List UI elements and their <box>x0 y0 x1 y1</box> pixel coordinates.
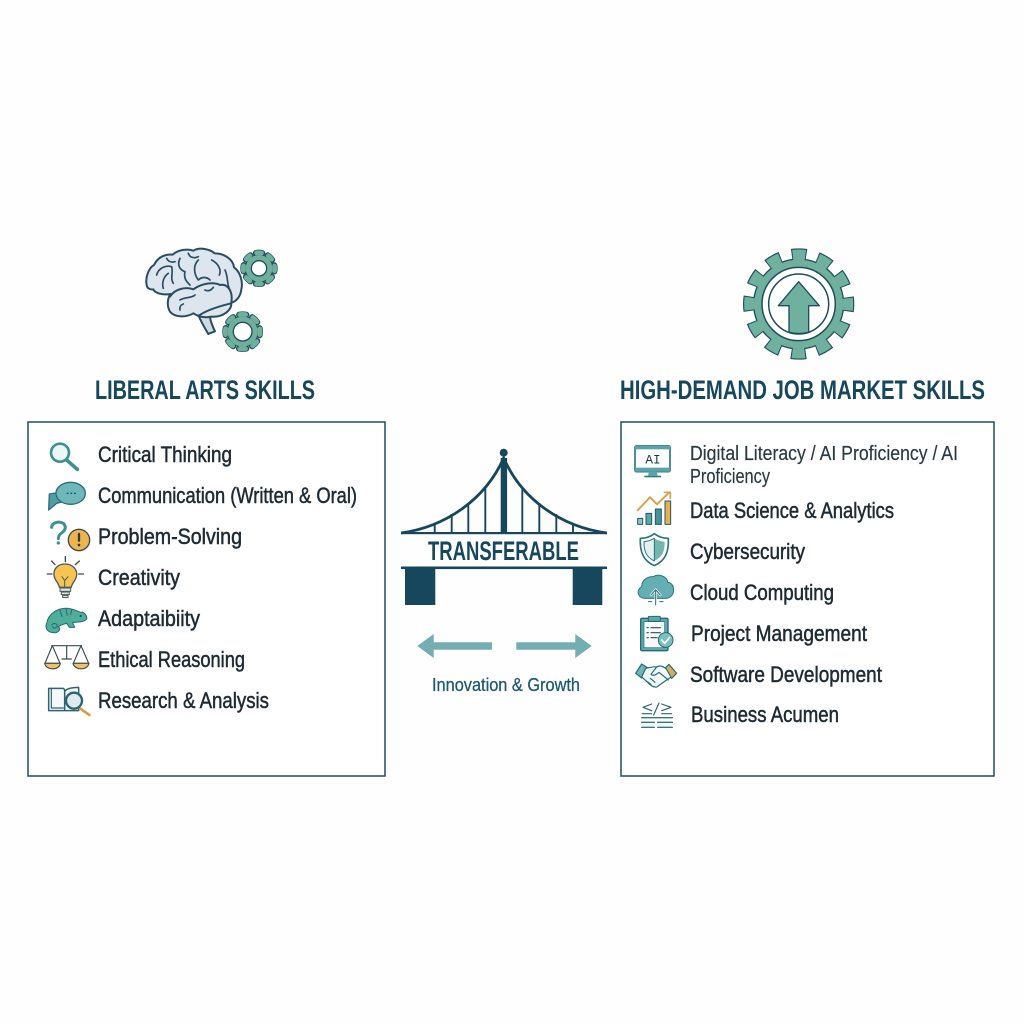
icon: speech bubbles <box>49 482 85 510</box>
text: data science: Data Science & Analytics <box>690 498 894 523</box>
text: cloud computing: Cloud Computing <box>690 580 834 605</box>
icon: code lines <box>642 703 672 727</box>
arrow: right <box>516 634 592 658</box>
bridge label: TRANSFERABLE <box>428 536 579 566</box>
icon: bridge <box>401 449 607 605</box>
lower deck <box>401 566 607 569</box>
hangers <box>435 488 573 533</box>
text: innovation and growth: Innovation & Growth <box>432 675 580 695</box>
icon: handshake <box>636 664 677 687</box>
text: creativity: Creativity <box>98 565 180 590</box>
text: research and analysis: Research & Analysis <box>98 688 269 713</box>
text: cybersecurity: Cybersecurity <box>690 539 805 564</box>
tower top <box>500 449 508 457</box>
left pier <box>405 568 435 605</box>
icon: light bulb <box>47 557 83 598</box>
text: business acumen: Business Acumen <box>691 702 839 727</box>
text: problem-solving: Problem-Solving <box>98 524 242 549</box>
icon: magnifying glass <box>51 444 77 469</box>
icon: chameleon <box>46 608 87 633</box>
icon: brain with gears <box>146 249 275 349</box>
text: project management: Project Management <box>691 621 867 646</box>
large gear <box>225 314 260 349</box>
icon: cloud <box>638 575 674 605</box>
text: communication: Communication (Written & Oral) <box>98 483 357 508</box>
icon: clipboard <box>641 616 673 651</box>
icon: gear with up arrow <box>749 255 848 353</box>
text: ethical reasoning: Ethical Reasoning <box>98 647 245 672</box>
arrow: left <box>417 634 492 658</box>
text: adaptability: Adaptaibiity <box>98 606 200 631</box>
icon: scales <box>45 646 89 669</box>
small gear <box>243 253 275 284</box>
icon: shield <box>640 534 668 566</box>
brain <box>146 249 242 334</box>
cables <box>401 458 607 533</box>
text: proficiency: Proficiency <box>690 466 770 488</box>
icon: AI monitor <box>635 446 670 477</box>
heading: liberal arts skills: LIBERAL ARTS SKILLS <box>95 375 315 405</box>
text: digital literacy: Digital Literacy / AI Proficiency / AI <box>690 443 958 465</box>
panel: liberal arts skills <box>28 422 385 776</box>
icon: growth chart <box>638 492 671 524</box>
text: critical thinking: Critical Thinking <box>98 442 232 467</box>
right pier <box>573 568 602 605</box>
upper deck <box>401 532 607 534</box>
icon: book and magnifier <box>49 687 89 715</box>
icon: AI monitor: AI <box>645 452 661 467</box>
icon: question and exclamation <box>52 522 90 551</box>
text: software development: Software Development <box>690 662 882 687</box>
panel: high-demand skills <box>621 422 994 776</box>
